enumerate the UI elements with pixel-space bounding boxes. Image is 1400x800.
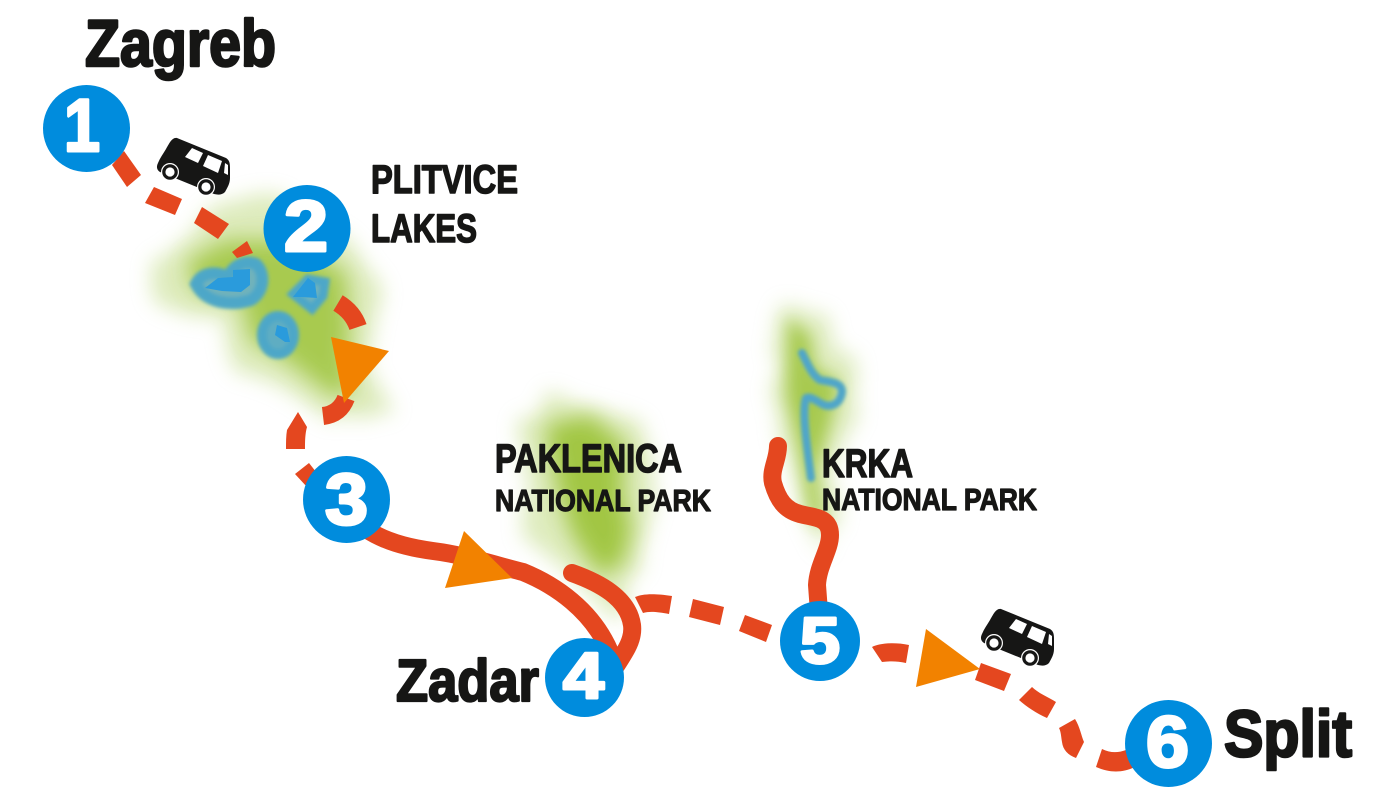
lake: Plitvice south lake	[262, 316, 294, 354]
route: Paklenica to stop 5 dashes	[635, 594, 772, 642]
marker: stop 3: 3	[325, 460, 368, 540]
label: Krka National Park	[822, 442, 1037, 517]
heading: Split: Split	[1224, 696, 1352, 770]
marker: stop 4	[545, 638, 624, 717]
marker: stop 1: 1	[64, 84, 100, 167]
route: Krka side road	[772, 446, 830, 612]
icon: van near Zagreb	[157, 138, 230, 196]
marker: stop 6: 6	[1146, 703, 1189, 783]
marker: stop 1	[43, 84, 130, 172]
marker: stop 6	[1125, 700, 1212, 787]
park: Plitvice Lakes forest	[154, 190, 388, 422]
label: Paklenica National Park: PAKLENICA	[495, 437, 682, 481]
river: Krka	[802, 353, 842, 478]
label: Plitvice Lakes: PLITVICE	[371, 158, 518, 202]
label: Krka National Park: NATIONAL PARK	[822, 483, 1037, 517]
park: Krka forest	[774, 302, 858, 548]
heading: Zagreb: Zagreb	[85, 6, 276, 80]
route: Paklenica side road	[572, 573, 632, 672]
marker: stop 4: 4	[563, 639, 604, 712]
arrow: direction marker near Plitvice	[331, 337, 389, 403]
marker: stop 2	[264, 185, 350, 272]
marker: stop 2: 2	[284, 187, 328, 267]
icon: van near Split	[981, 609, 1054, 667]
label: Paklenica National Park	[495, 437, 711, 518]
heading: Zadar: Zadar	[396, 648, 539, 714]
marker: stop 5	[780, 601, 860, 681]
arrow: direction marker toward Zadar	[445, 531, 512, 588]
marker: stop 3	[303, 456, 390, 543]
arrow: direction marker toward Split	[916, 629, 980, 687]
label: Plitvice Lakes: LAKES	[371, 207, 477, 251]
marker: stop 5: 5	[800, 604, 840, 677]
route: Plitvice to stop 3 dashes	[286, 303, 358, 487]
park: Paklenica forest	[515, 396, 652, 620]
label: Paklenica National Park: NATIONAL PARK	[495, 484, 711, 518]
lake: Plitvice east lake	[293, 278, 325, 309]
route: stop 3 to Zadar solid road	[366, 529, 610, 652]
label: Plitvice Lakes	[371, 158, 518, 251]
lake: Plitvice west lake	[196, 263, 262, 303]
route: stop 5 to Split dashes	[872, 643, 1135, 772]
route: Zagreb to Plitvice dashes	[112, 151, 253, 258]
label: Krka National Park: KRKA	[822, 442, 913, 486]
